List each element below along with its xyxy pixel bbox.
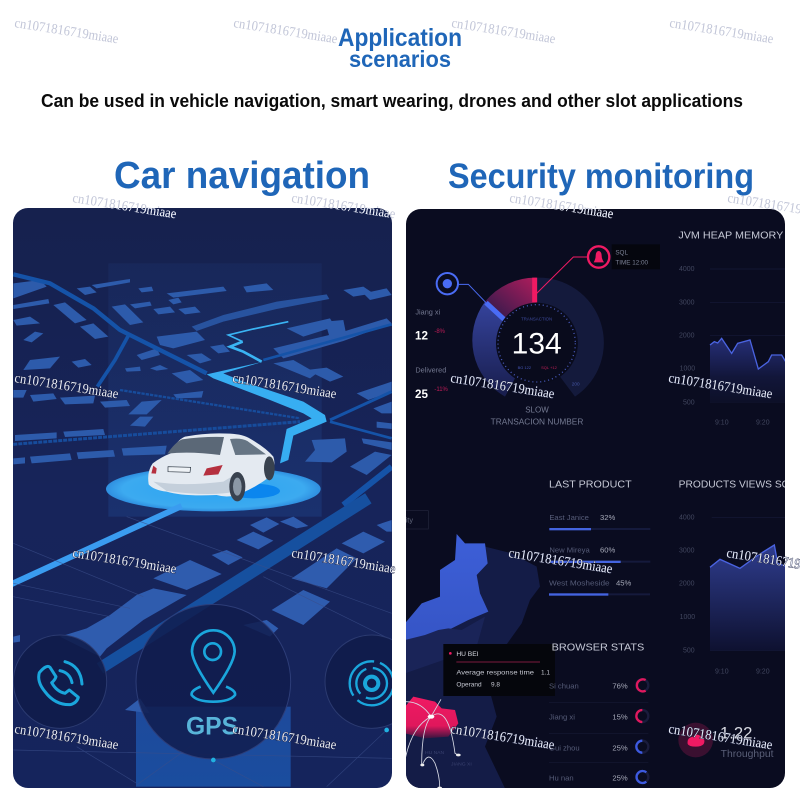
dashboard lower section xyxy=(395,479,800,789)
list: last product: LAST PRODUCT xyxy=(549,479,632,490)
tooltip: Hu Bei xyxy=(443,644,555,696)
chart: JVM heap memory xyxy=(678,231,787,427)
chart: products views: 4000 xyxy=(679,514,695,521)
chart: products views xyxy=(679,480,785,674)
gauge xyxy=(472,278,604,397)
watermarks: cn1071816719miaae xyxy=(508,191,614,222)
roads lower xyxy=(12,498,392,787)
map: JIANG XI xyxy=(451,761,472,767)
tooltip: Hu Bei: 9.8 xyxy=(491,681,500,688)
icon: bell callout xyxy=(536,244,660,294)
gauge: SQL +12 xyxy=(541,365,558,370)
chart: products views: 9:10 xyxy=(715,668,729,675)
list: last product: West Mosheside xyxy=(549,578,610,587)
gauge stats: Delivered xyxy=(415,366,446,375)
watermarks: cn1071816719miaae xyxy=(71,191,177,222)
title: Application xyxy=(338,24,462,52)
gauge stats: 12 xyxy=(415,330,428,343)
tooltip: Hu Bei: Average response time xyxy=(456,669,534,676)
chart: products views: 2000 xyxy=(679,581,695,588)
chart: products views: 9:20 xyxy=(756,668,770,675)
watermarks: cn1071816719miaae xyxy=(231,722,337,753)
panel: car navigation xyxy=(12,208,418,788)
dashboard upper section xyxy=(415,231,787,427)
watermarks: cn1071816719miaae xyxy=(71,191,177,222)
subtitle: Can be used in vehicle navigation, smart wearing, drones and other slot applications xyxy=(41,91,743,111)
watermarks: cn1071816719miaae xyxy=(507,546,613,577)
filter box: ity xyxy=(406,516,413,525)
throughput stat: Throughput xyxy=(721,749,774,760)
watermarks: cn1071816719miaae xyxy=(290,191,396,222)
watermarks: cn1071816719miaae xyxy=(450,16,556,47)
watermarks: cn1071816719miaae xyxy=(668,16,774,47)
chart: JVM heap memory: 2000 xyxy=(679,333,695,340)
tooltip: Hu Bei: 1.1 xyxy=(541,669,550,676)
watermarks: cn1071816719miaae xyxy=(449,722,555,753)
heading: security monitoring: Security monitoring xyxy=(448,157,754,196)
icon: clock callout xyxy=(437,273,486,303)
chart: JVM heap memory: 1000 xyxy=(680,366,695,373)
watermarks: cn1071816719miaae xyxy=(231,371,337,402)
tooltip: Hu Bei: HU BEI xyxy=(456,651,479,658)
watermarks: cn1071816719miaae xyxy=(13,722,119,753)
panel: security monitoring xyxy=(395,209,800,789)
gauge: 200 xyxy=(572,382,580,387)
list: browser stats: 25% xyxy=(612,774,628,783)
filter box xyxy=(402,511,428,529)
watermarks: cn1071816719miaae xyxy=(508,191,614,222)
chart: JVM heap memory: JVM HEAP MEMORY xyxy=(678,231,784,242)
watermarks: cn1071816719miaae xyxy=(13,16,119,47)
throughput stat xyxy=(678,723,774,760)
gauge stats xyxy=(415,307,584,426)
watermarks: cn1071816719miaae xyxy=(13,371,119,402)
watermarks: cn1071816719miaae xyxy=(290,546,396,577)
chart: JVM heap memory: 9:20 xyxy=(756,420,770,427)
icon: bell callout: TIME 12:00 xyxy=(615,259,649,266)
list: last product: 45% xyxy=(616,578,632,587)
chart: JVM heap memory: 500 xyxy=(683,399,695,406)
gauge stats: TRANSACION NUMBER xyxy=(491,417,584,426)
list: browser stats: Jiang xi xyxy=(549,713,575,722)
list: last product: East Janice xyxy=(549,513,589,522)
chart: JVM heap memory: 3000 xyxy=(679,299,695,306)
list: browser stats: 76% xyxy=(612,682,628,691)
watermarks: cn1071816719miaae xyxy=(71,546,177,577)
list: browser stats: BROWSER STATS xyxy=(552,643,645,654)
list: browser stats: 25% xyxy=(612,743,628,752)
gauge stats: 25 xyxy=(415,388,428,401)
chart: products views: 500 xyxy=(683,647,695,654)
list: browser stats: Si chuan xyxy=(549,682,579,691)
icon: GPS xyxy=(136,604,291,762)
heading: car navigation: Car navigation xyxy=(114,155,370,197)
gauge: BG 122 xyxy=(518,365,532,370)
blue disc xyxy=(106,467,321,511)
icon: phone xyxy=(13,635,107,728)
chart: JVM heap memory: 4000 xyxy=(679,266,695,273)
chart: products views: 1000 xyxy=(680,614,695,621)
map: HU NAN xyxy=(425,750,445,756)
list: last product: 60% xyxy=(600,546,616,555)
chart: products views: 3000 xyxy=(679,548,695,555)
gauge: 134 xyxy=(512,328,562,361)
icon: lens xyxy=(324,634,392,732)
gauge stats: SLOW xyxy=(525,405,549,414)
throughput stat: 1.22 xyxy=(720,723,752,742)
watermarks: cn1071816719miaae xyxy=(667,722,773,753)
navigation route xyxy=(207,322,327,463)
tooltip: Hu Bei: Operand xyxy=(456,681,482,688)
list: browser stats: Gui zhou xyxy=(549,743,580,752)
gauge stats: -8% xyxy=(434,329,446,335)
icon: GPS: GPS xyxy=(186,713,238,740)
map upper section xyxy=(13,263,392,517)
list: last product: 32% xyxy=(600,513,616,522)
icon: bell callout: SQL xyxy=(615,250,628,257)
watermarks: cn1071816719miaae xyxy=(667,371,773,402)
roads xyxy=(13,274,392,505)
chart: JVM heap memory: 9:10 xyxy=(715,420,729,427)
list: browser stats xyxy=(549,643,648,783)
watermarks: cn1071816719miaae xyxy=(290,191,396,222)
car xyxy=(148,433,280,501)
watermarks: cn1071816719miaae xyxy=(449,371,555,402)
gauge: TRANSACTION xyxy=(521,317,552,322)
gauge stats: -11% xyxy=(434,387,449,393)
title: scenarios xyxy=(349,46,451,72)
watermarks: cn1071816719miaae xyxy=(232,16,338,47)
list: last product xyxy=(549,479,650,596)
list: browser stats: 15% xyxy=(612,713,628,722)
gauge stats: Jiang xi xyxy=(415,307,441,316)
map lower section xyxy=(12,498,418,787)
title xyxy=(338,24,462,72)
list: browser stats: Hu nan xyxy=(549,774,574,783)
list: last product: New Mireya xyxy=(549,546,590,555)
map xyxy=(395,534,540,789)
